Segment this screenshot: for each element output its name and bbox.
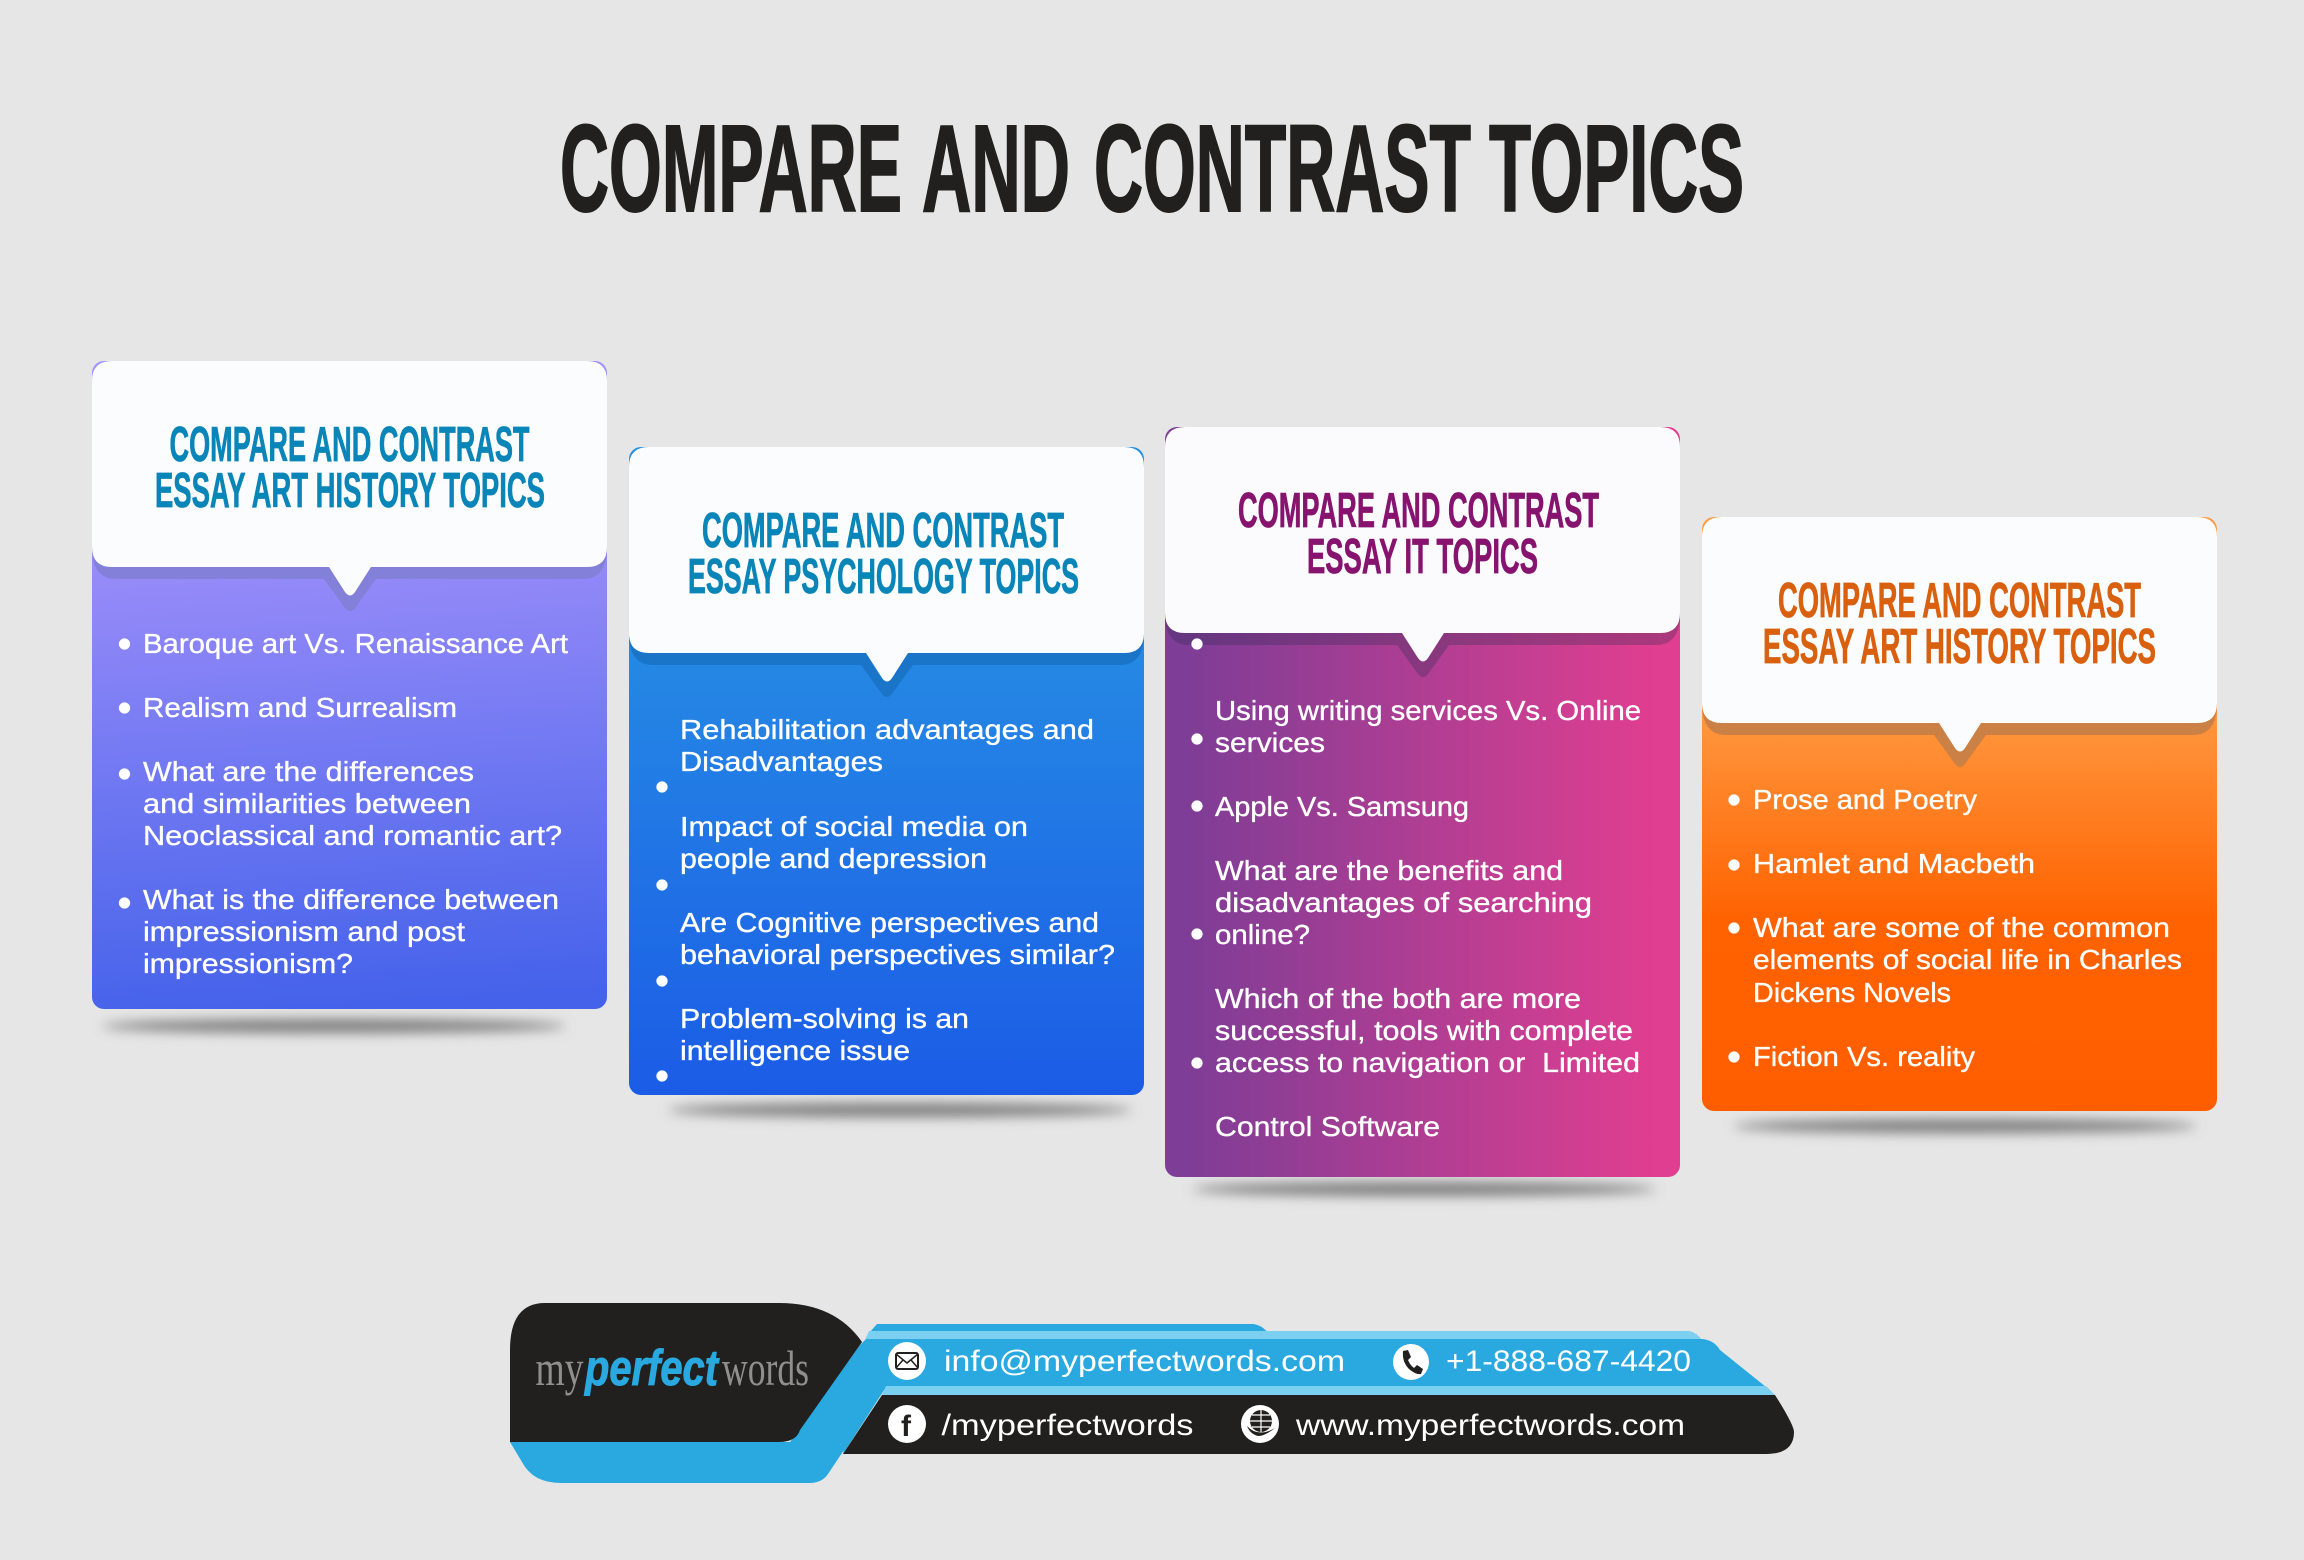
contact band blue [843,1339,1766,1454]
card body [1702,517,2217,1111]
bullet list: Disadvantages [680,746,883,777]
bullet list: intelligence issue [680,1035,910,1066]
panel: psychology topics (blue) [629,447,1144,1117]
heading bubble [1165,427,1680,662]
bullet list: Rehabilitation advantages and [680,714,1094,745]
title: COMPARE [560,101,902,238]
heading: COMPARE AND CONTRAST [1238,484,1599,538]
logo [536,1340,809,1396]
bullet list: What are the benefits and [1215,855,1563,886]
icon: phone [1393,1344,1429,1380]
heading bubble [629,447,1144,682]
bullet list [1192,638,1641,1142]
bullet list [1728,784,2182,1072]
bullet list: people and depression [680,843,987,874]
bullet list [656,714,1115,1082]
footer banner [510,1303,1794,1483]
heading shadow [92,547,607,611]
facebook handle: /myperfectwords [942,1409,1194,1442]
heading shadow [629,633,1144,697]
heading bubble [92,361,607,596]
bullet list: Realism and Surrealism [143,692,457,723]
bullet list: Neoclassical and romantic art? [143,820,562,851]
logo black tab [510,1303,862,1442]
bullet list: elements of social life in Charles [1753,944,2182,975]
card body [1165,427,1680,1177]
panel: art history topics (orange) [1702,517,2217,1133]
icon: facebook [888,1405,926,1443]
title: TOPICS [1489,101,1744,238]
bullet list: online? [1215,919,1310,950]
card drop shadow [102,1019,566,1033]
icon: facebook: f [901,1410,912,1443]
bullet list: Baroque art Vs. Renaissance Art [143,628,568,659]
lower black band [843,1395,1794,1454]
website: www.myperfectwords.com [1295,1409,1685,1442]
bullet list: Control Software [1215,1111,1440,1142]
bullet list: Are Cognitive perspectives and [680,907,1099,938]
bullet list: What are some of the common [1753,912,2170,943]
bullet list [119,628,568,979]
bullet list: successful, tools with complete [1215,1015,1633,1046]
heading shadow [1165,613,1680,677]
bullet list: impressionism? [143,948,353,979]
heading [1763,574,2156,674]
logo tab blue underlay [510,1339,900,1483]
heading bubble [1702,517,2217,752]
phone number: +1-888-687-4420 [1446,1345,1691,1378]
bullet list: access to navigation or Limited [1215,1047,1640,1078]
bullet list: Dickens Novels [1753,977,1951,1008]
icon: web globe [1241,1405,1279,1443]
bullet list: What is the difference between [143,884,559,915]
bullet list: Using writing services Vs. Online [1215,695,1641,726]
logo: my [536,1340,584,1396]
heading [688,504,1079,604]
bullet list: disadvantages of searching [1215,887,1592,918]
card drop shadow [1192,1182,1656,1196]
bullet list: Impact of social media on [680,811,1028,842]
card body [92,361,607,1009]
logo: perfect [583,1340,720,1396]
bullet list: services [1215,727,1325,758]
lower light stripe [882,1386,1775,1395]
panel: IT topics (magenta) [1165,427,1680,1196]
bullet list: impressionism and post [143,916,465,947]
title: CONTRAST [1094,101,1471,238]
heading: ESSAY ART HISTORY TOPICS [155,464,545,518]
title [560,101,1744,238]
card drop shadow [668,1103,1132,1117]
bullet list: Which of the both are more [1215,983,1581,1014]
logo: words [722,1340,809,1396]
heading: ESSAY PSYCHOLOGY TOPICS [688,550,1079,604]
email address: info@myperfectwords.com [944,1345,1345,1378]
contact band light stripe [865,1331,1702,1340]
title: AND [922,101,1070,238]
bullet list: Hamlet and Macbeth [1753,848,2035,879]
panel: art history topics (purple) [92,361,607,1033]
heading shadow [1702,703,2217,767]
bullet list: What are the differences [143,756,474,787]
icon: email [888,1342,926,1380]
bullet list: Problem-solving is an [680,1003,969,1034]
heading: ESSAY IT TOPICS [1307,530,1538,584]
bullet list: Prose and Poetry [1753,784,1977,815]
bullet list: Fiction Vs. reality [1753,1041,1975,1072]
heading [155,418,545,518]
bullet list: and similarities between [143,788,471,819]
card drop shadow [1733,1119,2197,1133]
heading: COMPARE AND CONTRAST [702,504,1064,558]
bullet list: Apple Vs. Samsung [1215,791,1469,822]
heading: COMPARE AND CONTRAST [170,418,530,472]
card body [629,447,1144,1095]
bullet list: behavioral perspectives similar? [680,939,1115,970]
contact band top tab [869,1324,1268,1333]
heading [1238,484,1599,584]
